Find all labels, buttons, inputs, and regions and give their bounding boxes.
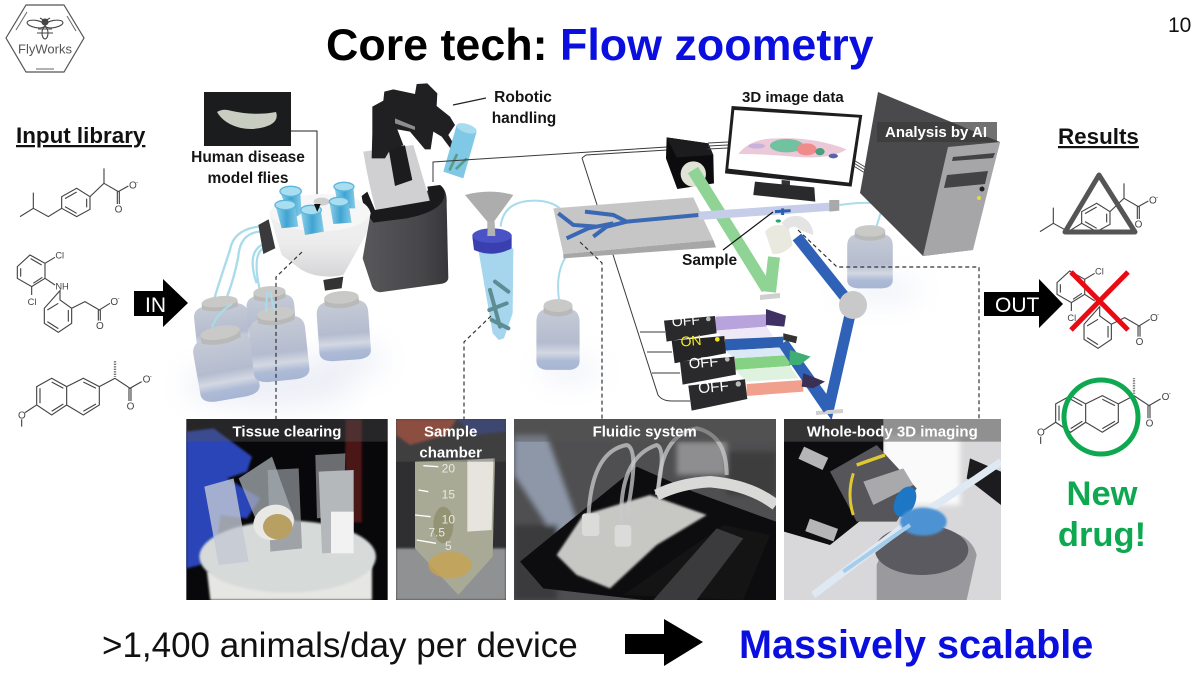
tube cap <box>472 235 512 254</box>
switch: OFF violet: OFF <box>671 311 700 330</box>
arrow: IN: IN <box>145 294 166 317</box>
molecule: naproxen result with green circle: O <box>1146 419 1154 430</box>
molecule: ibuprofen result with triangle <box>1040 175 1158 232</box>
pointer: larva to vials <box>291 131 317 208</box>
robot base <box>363 185 448 292</box>
caption: sample chamber: chamber <box>419 445 482 462</box>
footer: throughput: >1,400 animals/day per device <box>102 626 578 665</box>
molecule: naproxen result with green circle <box>1037 378 1171 454</box>
molecule: naproxen input <box>18 361 152 427</box>
caption: whole-body 3D imaging: Whole-body 3D imaging <box>807 423 978 440</box>
photo: sample chamber: 5 <box>445 539 452 553</box>
robot signal wires <box>433 147 690 401</box>
molecule: diclofenac input: NH <box>55 281 69 291</box>
label: sample <box>682 212 773 269</box>
blue imaging beam <box>783 237 852 407</box>
waste bottle <box>847 225 893 288</box>
logo: FlyWorks hexagon <box>6 5 84 72</box>
molecule: diclofenac input <box>17 250 120 332</box>
footer: massively scalable: Massively scalable <box>739 623 1093 667</box>
label: human disease model flies: Human disease <box>191 149 305 166</box>
label: new drug: New <box>1067 475 1137 513</box>
robot white body <box>363 145 430 213</box>
switch: OFF red: OFF <box>698 378 730 397</box>
title: Core tech: Flow zoometry <box>326 20 874 70</box>
arrow: OUT: OUT <box>995 294 1040 317</box>
label: robotic handling: Robotic <box>494 89 552 106</box>
logo wordmark: FlyWorks <box>18 42 72 56</box>
chip channels <box>558 212 698 238</box>
molecule: diclofenac result with red cross: Cl <box>1067 313 1076 323</box>
laser switch boxes <box>664 311 747 411</box>
caption: sample chamber: Sample <box>424 423 477 440</box>
icon: fly <box>27 18 63 39</box>
monitor with 3D image <box>725 106 862 202</box>
photo: fluidic system <box>514 419 776 600</box>
capillary tube <box>813 462 1001 595</box>
molecule: diclofenac input: Cl <box>28 297 36 307</box>
arrow: OUT <box>984 279 1063 328</box>
molecule: ibuprofen result with triangle: O <box>1149 195 1157 206</box>
capillary <box>699 200 883 228</box>
objective lens <box>798 445 921 541</box>
vessel body <box>269 194 371 277</box>
tubing <box>210 227 267 330</box>
label: robotic handling: handling <box>492 110 556 127</box>
molecule: naproxen input: O <box>143 375 151 386</box>
larva photo <box>204 92 291 146</box>
vials <box>275 182 355 235</box>
conical tube <box>478 248 513 340</box>
tubing: chip to bottle <box>558 254 568 300</box>
molecule: naproxen input: O <box>127 401 135 412</box>
molecule: diclofenac input: O <box>96 321 104 332</box>
3D fly image <box>738 138 847 158</box>
molecule: diclofenac result with red cross <box>1057 266 1159 348</box>
photo: sample chamber: 15 <box>442 487 455 501</box>
molecule: ibuprofen input <box>20 168 138 217</box>
label: human disease model flies: model flies <box>208 170 288 187</box>
sample chamber tube with funnel <box>465 192 570 340</box>
scene floor shading <box>185 280 920 407</box>
molecule: diclofenac input: O <box>110 297 118 308</box>
icon: green circle <box>1064 380 1138 454</box>
camera <box>666 137 714 189</box>
arrow: IN <box>134 279 188 327</box>
caption: tissue clearing: Tissue clearing <box>233 423 341 440</box>
chamber outlet bottle <box>536 299 580 370</box>
switch: OFF green: OFF <box>688 354 719 373</box>
reservoir bottles: input <box>189 285 372 404</box>
lower mirror <box>760 293 843 415</box>
green laser beam <box>693 170 774 292</box>
label: sample: Sample <box>682 252 738 269</box>
molecule: ibuprofen input: O <box>129 180 137 191</box>
molecule: ibuprofen input: - <box>136 179 138 186</box>
molecule: naproxen input: - <box>150 373 152 380</box>
molecule: naproxen result with green circle: O <box>1162 392 1170 403</box>
dichroic mirrors <box>766 309 825 388</box>
clamp blocks <box>258 219 275 254</box>
molecule: naproxen result with green circle: - <box>1169 391 1171 398</box>
molecule: diclofenac result with red cross: - <box>1157 312 1159 319</box>
computer tower <box>860 92 1000 256</box>
label: new drug: drug! <box>1058 516 1146 554</box>
heading: input library: Input library <box>16 123 146 148</box>
relay mirror <box>839 291 867 319</box>
label: 3D image data: 3D image data <box>742 89 844 106</box>
robot black arm <box>372 83 457 158</box>
icon: red cross <box>1071 272 1128 330</box>
tissue clearing vessel <box>210 182 371 330</box>
molecule: naproxen input: O <box>18 410 26 421</box>
dashed connectors <box>276 230 979 419</box>
objective <box>765 216 813 254</box>
tubing to chip <box>501 201 570 227</box>
photo: whole-body 3D imaging <box>784 419 1001 600</box>
robot arm <box>362 83 478 292</box>
caption: fluidic system: Fluidic system <box>593 423 697 440</box>
photo: tissue clearing <box>186 419 388 600</box>
robot collar <box>362 185 445 223</box>
label: robotic handling <box>453 89 556 127</box>
photo: sample chamber <box>396 419 506 600</box>
photo: sample chamber: 7.5 <box>428 526 445 540</box>
robot held vial <box>443 121 478 178</box>
photo: sample chamber: 10 <box>442 512 455 526</box>
page number: 10 <box>1168 14 1191 37</box>
molecule: diclofenac result with red cross: Cl <box>1095 266 1104 276</box>
molecule: diclofenac input: - <box>117 296 120 303</box>
molecule: ibuprofen result with triangle: - <box>1156 194 1158 201</box>
switch: ON blue: ON <box>680 332 702 350</box>
molecule: ibuprofen input: O <box>115 205 123 216</box>
fluidic chip <box>553 197 716 258</box>
arrow: footer <box>625 619 703 666</box>
molecule: diclofenac result with red cross: O <box>1136 337 1144 348</box>
laser beams <box>716 309 828 409</box>
icon: grey triangle <box>1065 175 1135 232</box>
photo: sample chamber: 20 <box>442 461 455 475</box>
heading: results: Results <box>1058 124 1139 149</box>
molecule: naproxen result with green circle: O <box>1037 428 1045 439</box>
molecule: diclofenac result with red cross: O <box>1150 313 1158 324</box>
camera and monitor cables <box>708 142 865 173</box>
label: analysis by AI: Analysis by AI <box>885 124 987 141</box>
funnel <box>465 192 513 237</box>
molecule: ibuprofen result with triangle: O <box>1135 220 1143 231</box>
molecule: diclofenac input: Cl <box>55 250 64 260</box>
